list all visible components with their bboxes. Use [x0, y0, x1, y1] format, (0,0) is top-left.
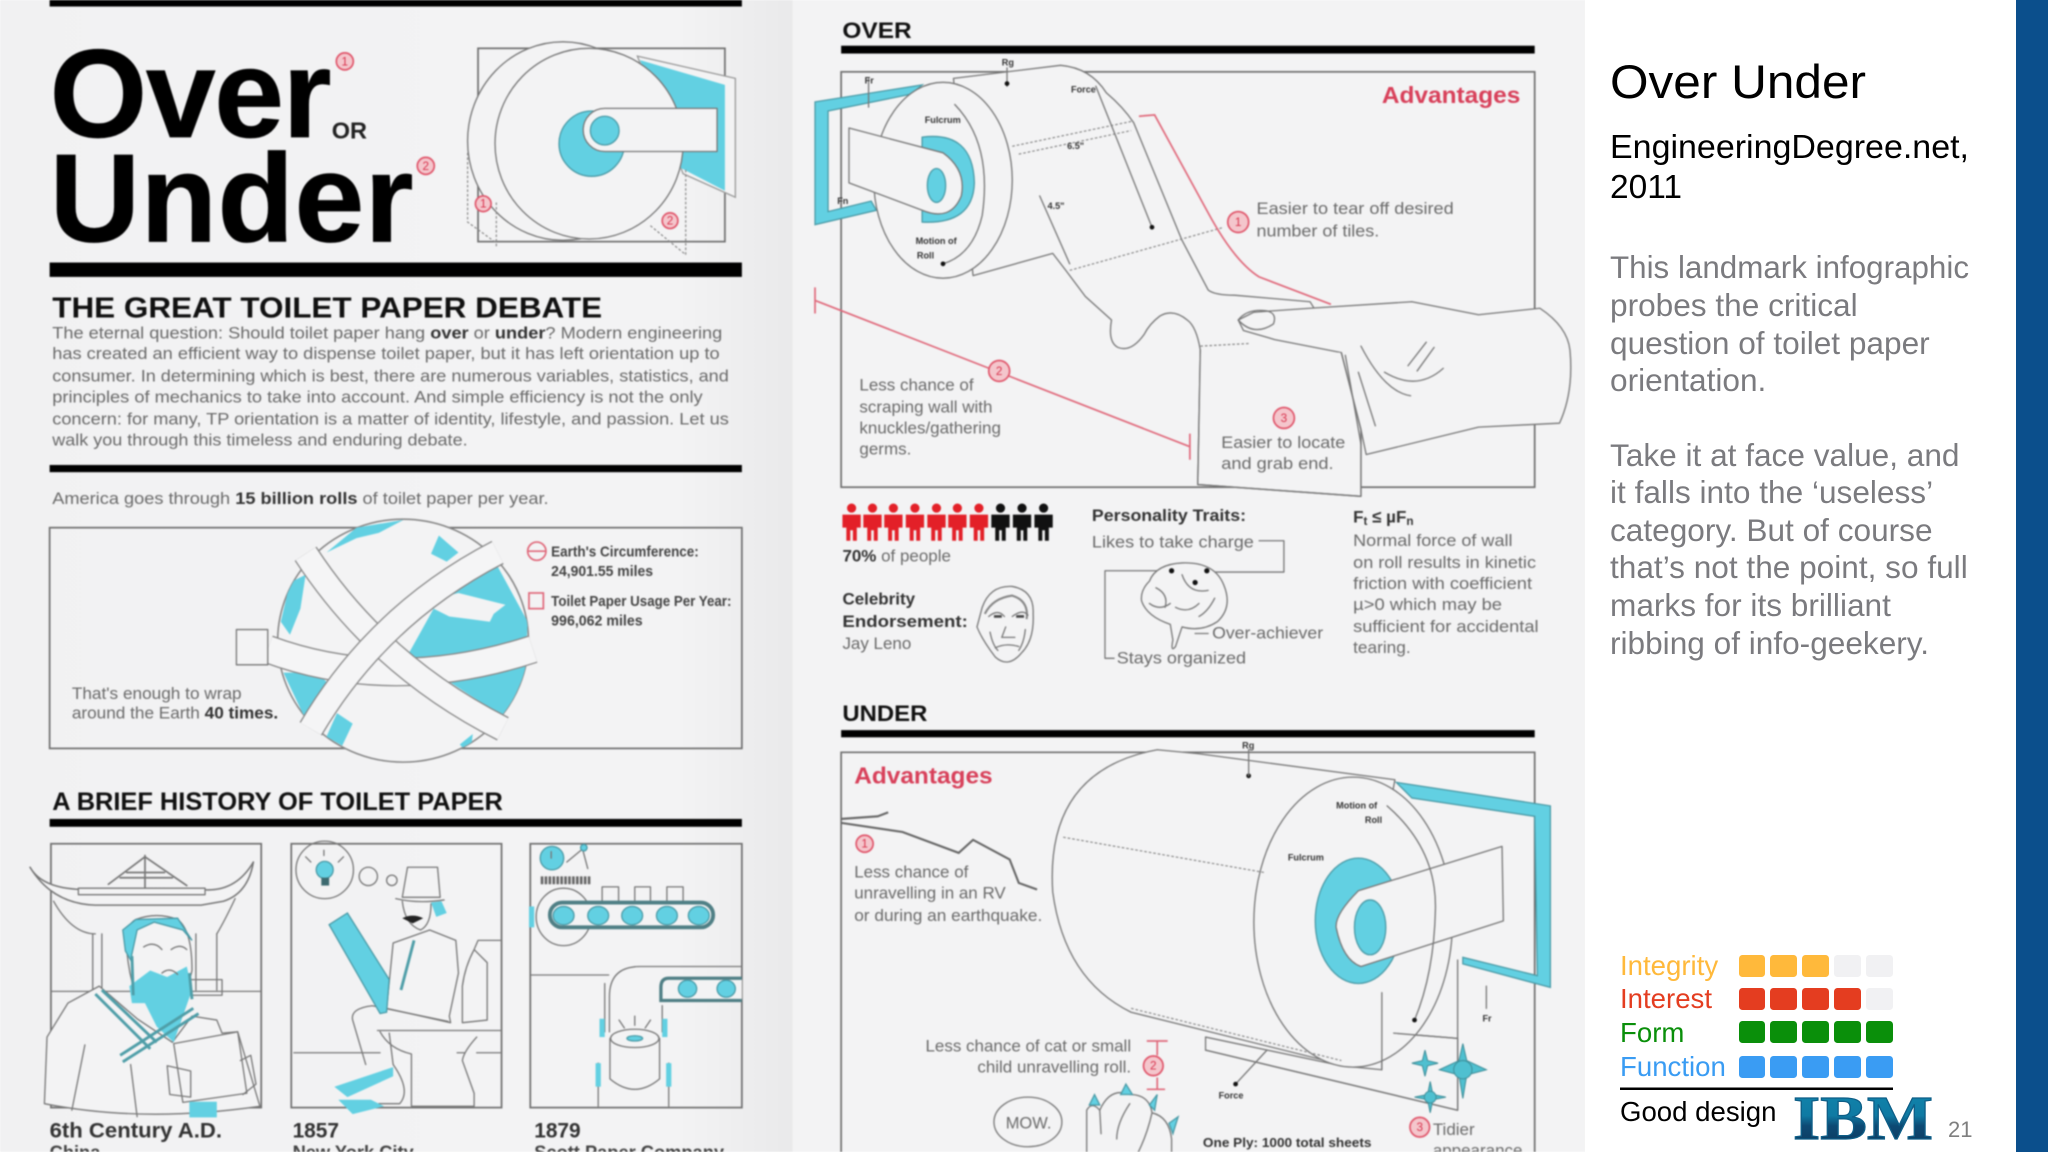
paper background: left page [0, 0, 793, 1152]
cracked road line [841, 812, 1037, 889]
paper roll: Rg [1242, 740, 1254, 750]
rule [50, 263, 742, 277]
icon: toilet roll diagram: 2 [667, 215, 673, 228]
callout 2: less scraping [859, 360, 1010, 459]
callout 2: less scraping: knuckles/gathering [859, 419, 1001, 438]
verdict: Good design [1620, 1096, 1776, 1127]
friction note: t [1364, 515, 1368, 528]
personality traits: Likes to take charge [1092, 532, 1254, 551]
speech bubble: mow: MOW. [1006, 1113, 1051, 1132]
callout 1: earthquake [854, 835, 1042, 925]
callout 1: earthquake: Less chance of [854, 863, 969, 882]
title: 1 [342, 55, 348, 68]
white panel background [1585, 0, 2016, 1152]
callout 1: tear: 1 [1235, 216, 1241, 229]
commentary paragraph 1 [1610, 249, 1969, 398]
callout 1: earthquake: 1 [861, 838, 868, 851]
rule [841, 46, 1535, 54]
celebrity endorsement: Endorsement: [842, 612, 968, 631]
friction note: µ>0 which may be [1353, 595, 1502, 614]
callout 3: tidier appearance: 3 [1416, 1121, 1423, 1134]
intro paragraph: consumer. In determining which is best, there are numerous variables, statistics, and [52, 366, 729, 385]
callout 2: less scraping: 2 [996, 365, 1002, 378]
page number: 21 [1948, 1117, 1972, 1142]
commentary paragraph 1: This landmark infographic [1610, 249, 1969, 285]
callout 1: earthquake: or during an earthquake. [854, 906, 1042, 925]
pagoda roof [30, 856, 260, 995]
paper roll: Roll [917, 251, 934, 261]
title: Under [50, 128, 414, 269]
paper roll: Fr [865, 76, 874, 86]
intro paragraph: has created an efficient way to dispense toilet paper, but it has left orientation up to [52, 344, 720, 363]
advantages label: Advantages [1382, 82, 1520, 108]
speech bubble: mow [994, 1097, 1062, 1147]
row: interest [1620, 983, 1893, 1014]
stat sentence: America goes through 15 billion rolls of toilet paper per year. [52, 489, 549, 508]
friction note: sufficient for accidental [1353, 617, 1539, 636]
sheet count: One Ply: 1000 total sheets [1203, 1135, 1371, 1150]
commentary paragraph 2: it falls into the ‘useless’ [1610, 474, 1933, 510]
commentary paragraph 2: ribbing of info-geekery. [1610, 625, 1929, 661]
celebrity endorsement [842, 586, 1033, 662]
intro paragraph: principles of mechanics to take into account. And simple efficiency is not the only [52, 387, 703, 406]
legend: toilet paper usage: 996,062 miles [551, 614, 643, 630]
infographic scan [0, 0, 1585, 1152]
commentary paragraph 2: Take it at face value, and [1610, 437, 1960, 473]
commentary paragraph 1: question of toilet paper [1610, 325, 1930, 361]
commentary paragraph 2: that’s not the point, so full [1610, 549, 1968, 585]
row: form [1620, 1017, 1893, 1048]
rule [50, 465, 742, 472]
logo: IBM: IBM [1793, 1085, 1933, 1152]
row: form: Form [1620, 1017, 1684, 1048]
callout 2: less scraping: scraping wall with [859, 398, 992, 417]
paper roll: Rg [1002, 57, 1014, 67]
panel: over diagram [815, 57, 1571, 496]
callout 1: tear: number of tiles. [1256, 221, 1379, 240]
intro paragraph [51, 323, 729, 449]
source citation [1610, 129, 1969, 206]
callout 3: easier to locate: 3 [1281, 412, 1288, 425]
heading: under: UNDER [842, 701, 927, 726]
history captions: 1879 [534, 1120, 581, 1143]
friction note: ≤ µF [1367, 507, 1406, 526]
paper roll: Fulcrum [1288, 853, 1324, 863]
history captions: 6th Century A.D. [50, 1120, 222, 1143]
row: interest: Interest [1620, 983, 1712, 1014]
icon: toilet roll diagram: 1 [480, 198, 487, 211]
icon: toilet roll diagram [468, 42, 735, 255]
callout 2: cat or child [925, 1036, 1168, 1089]
callout 1: tear: Easier to tear off desired [1256, 199, 1454, 218]
panel: under diagram [841, 740, 1550, 1152]
friction note: on roll results in kinetic [1353, 553, 1537, 572]
intro paragraph: walk you through this timeless and enduring debate. [51, 430, 468, 449]
legend: earth's circumference [528, 542, 699, 580]
title: 2 [423, 160, 429, 173]
paper roll: Fulcrum [925, 115, 961, 125]
friction note: tearing. [1353, 638, 1411, 657]
callout 2: cat or child: child unravelling roll. [977, 1057, 1131, 1076]
callout 3: easier to locate: and grab end. [1221, 454, 1334, 473]
legend: earth's circumference: Earth's Circumference: [551, 544, 699, 560]
panel: 6th century china [30, 844, 261, 1117]
legend: earth's circumference: 24,901.55 miles [551, 564, 653, 580]
panel: 1857 new york city [291, 841, 502, 1114]
personality traits [1092, 506, 1323, 668]
history captions: 1857 [293, 1120, 339, 1143]
teal bracket [1396, 782, 1550, 987]
paper roll: Fn [837, 196, 849, 206]
caption: wrap the earth: That's enough to wrap [72, 684, 242, 703]
red line: wall distance [815, 287, 1190, 460]
title: Over [50, 23, 330, 164]
red arrow: tear path [1139, 115, 1331, 304]
source citation: EngineeringDegree.net, [1610, 129, 1969, 166]
paper roll: Roll [1365, 815, 1382, 825]
personality traits: Over-achiever [1212, 624, 1323, 643]
thought bubble [296, 841, 397, 899]
paper roll: 4.5" [1048, 201, 1065, 211]
paper roll: 6.5" [1067, 141, 1084, 151]
title: OR [332, 117, 367, 143]
commentary paragraph 2: category. But of course [1610, 512, 1933, 548]
commentary paragraph 1: probes the critical [1610, 287, 1858, 323]
row: function [1620, 1051, 1893, 1082]
icon: globe wrapped in toilet paper [236, 519, 533, 762]
callout 1: earthquake: unravelling in an RV [854, 884, 1006, 903]
legend: toilet paper usage [529, 593, 731, 630]
slide title: Over Under [1610, 55, 1866, 108]
paper roll: Force [1219, 1090, 1243, 1100]
personality traits: Stays organized [1117, 649, 1246, 668]
celebrity endorsement: Celebrity [842, 590, 916, 609]
icon: cat paw [1087, 1084, 1178, 1152]
rule [841, 730, 1535, 737]
row: integrity: Integrity [1620, 950, 1718, 981]
row: function: Function [1620, 1051, 1726, 1082]
intro paragraph: concern: for many, TP orientation is a matter of identity, lifestyle, and passion. Let us [52, 409, 729, 428]
panel: globe wrap [50, 519, 742, 762]
caption: wrap the earth: around the Earth 40 times. [72, 703, 278, 722]
friction note [1353, 507, 1539, 657]
paper roll: Force [1071, 85, 1096, 95]
seated man [294, 867, 502, 1106]
friction note: Normal force of wall [1353, 531, 1512, 550]
legend: toilet paper usage: Toilet Paper Usage Per Year: [551, 594, 731, 610]
friction note: friction with coefficient [1353, 574, 1532, 593]
paper roll: Motion of [1336, 800, 1378, 810]
celebrity endorsement: Jay Leno [842, 634, 911, 653]
commentary paragraph 2 [1610, 437, 1968, 661]
panel: under diagram: Advantages [854, 763, 993, 789]
commentary paragraph 1: orientation. [1610, 362, 1766, 398]
history captions [50, 1120, 725, 1152]
pictogram: 70 percent of people [842, 504, 1053, 566]
callout 2: cat or child: 2 [1150, 1060, 1157, 1073]
personality traits: Personality Traits: [1092, 506, 1246, 525]
blue side band [2016, 0, 2048, 1152]
callout 3: easier to locate: Easier to locate [1221, 433, 1345, 452]
callout 1: tear [1228, 199, 1454, 240]
friction note: n [1406, 515, 1414, 528]
callout 2: less scraping: germs. [859, 440, 911, 459]
row: integrity [1620, 950, 1893, 981]
friction note: F [1353, 507, 1364, 526]
philosopher [44, 916, 260, 1117]
panel: 1879 scott paper company [529, 844, 742, 1108]
commentary paragraph 2: marks for its brilliant [1610, 587, 1891, 623]
paper roll [837, 57, 1361, 496]
rule [50, 819, 742, 827]
paper background: right page [793, 0, 1586, 1152]
title [50, 23, 434, 269]
callout 2: less scraping: Less chance of [859, 376, 974, 395]
icon: brain [1141, 563, 1227, 649]
heading: the great toilet paper debate: THE GREAT TOILET PAPER DEBATE [52, 292, 602, 324]
caption: wrap the earth [72, 684, 278, 722]
paper roll: Fr [1482, 1013, 1492, 1023]
paper roll [1052, 740, 1503, 1110]
callout 3: easier to locate [1221, 408, 1345, 473]
source citation: 2011 [1610, 169, 1682, 206]
callout 3: tidier appearance: Tidier [1433, 1120, 1475, 1139]
top rule [50, 0, 742, 7]
heading: over: OVER [842, 18, 912, 43]
paper roll: Motion of [916, 236, 958, 246]
icon: sparkles [1412, 1044, 1486, 1113]
icon: hand [1238, 302, 1571, 455]
pictogram: 70 percent of people: 70% of people [842, 547, 951, 566]
scorecard [1620, 950, 1893, 1127]
callout 2: cat or child: Less chance of cat or small [925, 1036, 1131, 1055]
intro paragraph: The eternal question: Should toilet paper hang over or under ? Modern engineering [52, 323, 722, 342]
callout 3: tidier appearance [1410, 1117, 1522, 1152]
heading: a brief history: A BRIEF HISTORY OF TOILET PAPER [52, 789, 503, 816]
bracket: teal wall mount [815, 85, 922, 225]
